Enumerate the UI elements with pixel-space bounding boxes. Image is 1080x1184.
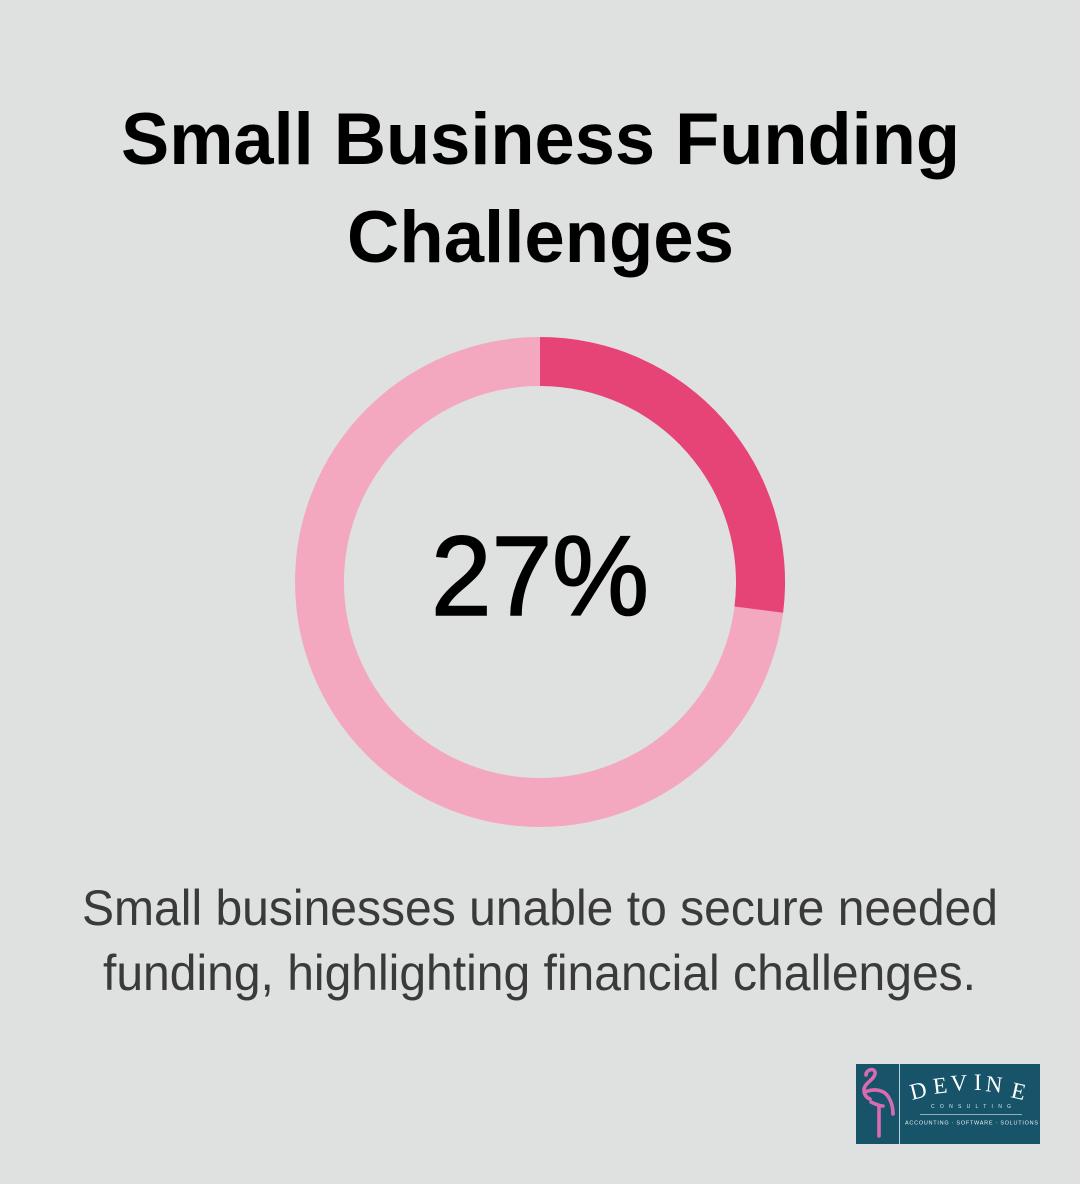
description text: funding, highlighting financial challenges. bbox=[103, 945, 976, 1001]
title bbox=[121, 99, 960, 278]
title: Challenges bbox=[347, 197, 734, 278]
logo subtitle: CONSULTING bbox=[931, 1104, 1011, 1110]
donut chart: 27% bbox=[320, 337, 785, 802]
logo tagline: ACCOUNTING · SOFTWARE · SOLUTIONS bbox=[905, 1120, 1038, 1126]
logo wordmark: I bbox=[974, 1070, 982, 1095]
logo wordmark: E bbox=[1009, 1078, 1028, 1105]
logo wordmark: V bbox=[950, 1070, 968, 1096]
logo wordmark: D bbox=[907, 1077, 929, 1105]
donut value: 27% bbox=[431, 513, 649, 639]
description text bbox=[82, 880, 998, 1001]
logo wordmark: E bbox=[932, 1072, 949, 1099]
logo wordmark: N bbox=[984, 1071, 1004, 1098]
description text: Small businesses unable to secure needed bbox=[82, 880, 998, 936]
icon: flamingo bbox=[864, 1070, 893, 1136]
logo: Devine Consulting bbox=[856, 1064, 1040, 1144]
title: Small Business Funding bbox=[121, 99, 960, 180]
